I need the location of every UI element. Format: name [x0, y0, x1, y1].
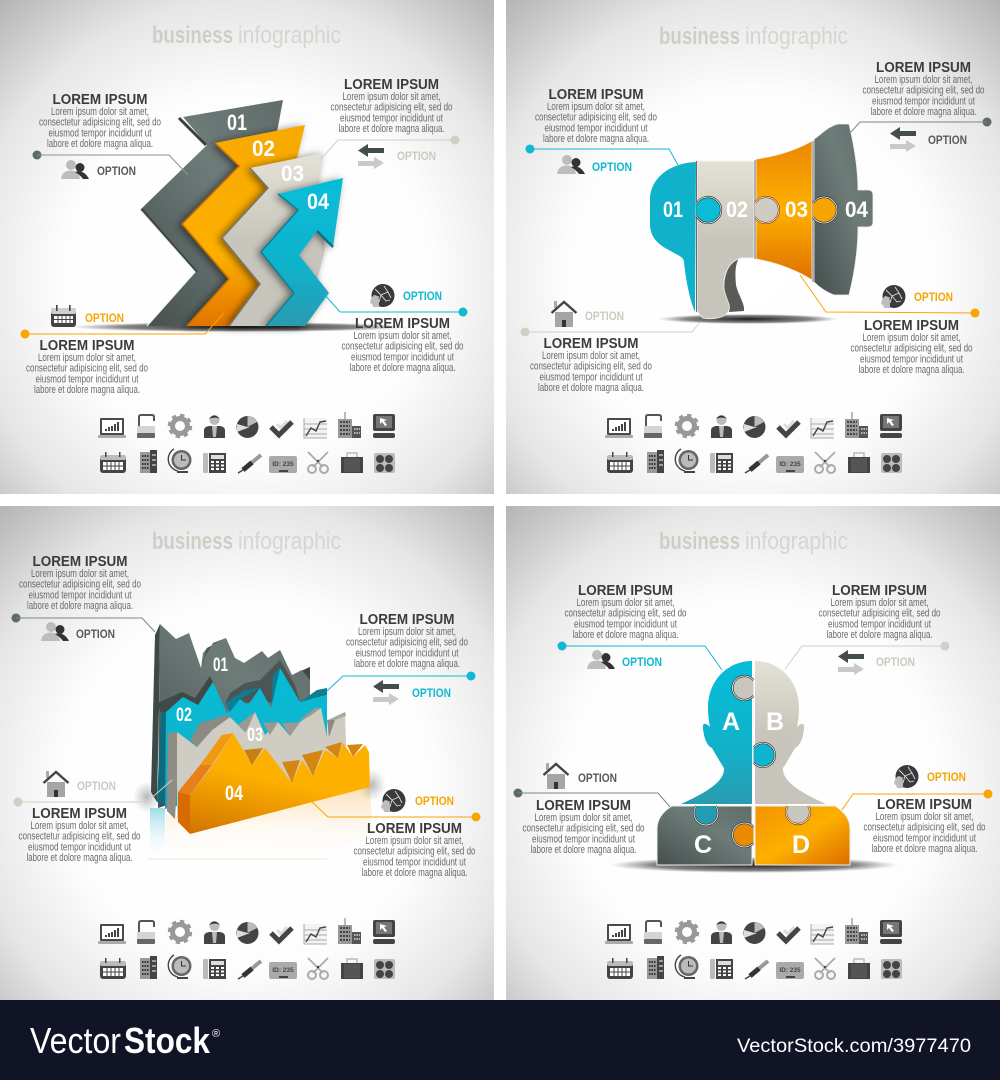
- piece 02 beige: [697, 161, 754, 319]
- text block: top left: consectetur adipisicing elit, sed do: [39, 117, 161, 129]
- letter labels: [694, 708, 810, 859]
- panel background: [506, 0, 1000, 494]
- icon strip: ID: 235: [272, 461, 294, 468]
- soft shadow left: [133, 781, 161, 813]
- text block: bottom left: labore et dolore magna aliqua.: [530, 844, 636, 856]
- number labels: 03: [785, 197, 808, 222]
- text block: top right: labore et dolore magna aliqua.: [338, 123, 444, 135]
- text block: bottom right: eiusmod tempor incididunt ut: [860, 353, 963, 365]
- text block: top left: Lorem ipsum dolor sit amet,: [51, 106, 149, 118]
- text block: top left: [564, 583, 686, 641]
- text block: bottom left: eiusmod tempor incididunt ut: [28, 841, 131, 853]
- title: infographic: [745, 528, 848, 555]
- icon strip: [98, 412, 395, 473]
- panel: megaphone: [506, 0, 1000, 494]
- connector: grey: [12, 614, 155, 632]
- ground shadow: [70, 322, 410, 332]
- text block: top left: Lorem ipsum dolor sit amet,: [576, 597, 674, 609]
- text block: top right: [818, 583, 940, 641]
- text block: bottom right: LOREM IPSUM: [864, 318, 959, 334]
- option label: OPTION: [622, 655, 662, 669]
- panel: 3D area chart: [0, 506, 494, 1000]
- number labels: 04: [307, 189, 330, 214]
- layer 04 orange: [178, 733, 370, 834]
- text block: bottom left: [26, 338, 148, 396]
- text block: bottom left: Lorem ipsum dolor sit amet,: [534, 812, 632, 824]
- option label: OPTION: [592, 160, 632, 174]
- icon: arrows: [838, 650, 864, 675]
- connector: beige: [14, 780, 172, 806]
- piece 01 blue: [650, 162, 696, 312]
- option label: OPTION: [85, 311, 124, 325]
- icon: people: [587, 650, 615, 669]
- handle shadow: [724, 258, 744, 312]
- connector: orange: [800, 275, 980, 318]
- text block: bottom right: LOREM IPSUM: [877, 797, 972, 813]
- icon: globe head: [894, 765, 918, 788]
- icon: people: [61, 160, 89, 179]
- text block: bottom left: [530, 336, 652, 394]
- text block: top right: LOREM IPSUM: [876, 60, 971, 76]
- text block: bottom left: LOREM IPSUM: [32, 806, 127, 822]
- text block: bottom left: consectetur adipisicing elit, sed do: [522, 823, 644, 835]
- logo: ®: [212, 1028, 220, 1040]
- text block: top right: eiusmod tempor incididunt ut: [356, 647, 458, 659]
- connector: blue: [325, 295, 468, 316]
- text block: top right: [330, 77, 452, 135]
- layer 01 grey: [151, 624, 310, 808]
- text block: top left: consectetur adipisicing elit, sed do: [564, 608, 686, 620]
- piece A blue: [681, 661, 752, 804]
- text block: top left: labore et dolore magna aliqua.: [572, 629, 678, 641]
- icon: arrows: [358, 144, 384, 169]
- puzzle knobs: [696, 197, 837, 223]
- title: [152, 528, 341, 555]
- number labels: [663, 197, 869, 222]
- text block: bottom right: labore et dolore magna aliqua.: [350, 362, 456, 374]
- text block: bottom left: Lorem ipsum dolor sit amet,: [542, 350, 640, 362]
- connector: orange: [20, 313, 224, 338]
- text block: bottom left: labore et dolore magna aliqua.: [34, 384, 140, 396]
- text block: top right: consectetur adipisicing elit, sed do: [330, 102, 452, 114]
- icon: globe head: [370, 284, 394, 307]
- number labels: 02: [252, 136, 275, 161]
- text block: bottom left: LOREM IPSUM: [544, 336, 638, 352]
- text block: top left: Lorem ipsum dolor sit amet,: [547, 101, 645, 113]
- piece D orange: [755, 806, 850, 865]
- icon: calendar: [51, 305, 76, 327]
- text block: top left: [39, 92, 161, 150]
- text block: top right: Lorem ipsum dolor sit amet,: [830, 597, 928, 609]
- option label: OPTION: [76, 627, 115, 641]
- text block: top left: labore et dolore magna aliqua.: [47, 138, 153, 150]
- text block: bottom right: LOREM IPSUM: [367, 821, 462, 837]
- option label: OPTION: [585, 309, 624, 323]
- icon: house: [44, 771, 68, 797]
- panel background: [0, 0, 494, 494]
- title: business: [152, 22, 233, 49]
- icon strip: ID: 235: [272, 967, 294, 974]
- text block: bottom left: LOREM IPSUM: [536, 798, 631, 814]
- icon strip: [605, 412, 902, 473]
- option label: OPTION: [578, 771, 617, 785]
- text block: bottom right: Lorem ipsum dolor sit amet,: [366, 835, 464, 847]
- text block: bottom left: consectetur adipisicing elit, sed do: [18, 831, 140, 843]
- text block: top left: eiusmod tempor incididunt ut: [544, 122, 648, 134]
- option label: OPTION: [415, 794, 454, 808]
- text block: bottom right: [354, 821, 476, 879]
- piece C grey: [657, 806, 752, 865]
- text block: top left: LOREM IPSUM: [32, 554, 128, 570]
- connector: beige: [320, 136, 460, 160]
- icon: house: [544, 763, 568, 789]
- number labels: 04: [225, 782, 243, 805]
- text block: bottom left: [18, 806, 140, 864]
- text block: bottom right: [850, 318, 972, 376]
- text block: top left: eiusmod tempor incididunt ut: [48, 127, 152, 139]
- text block: bottom right: consectetur adipisicing elit, sed do: [354, 846, 476, 858]
- chart: megaphone puzzle: [650, 124, 873, 319]
- title: infographic: [238, 528, 341, 555]
- letter labels: B: [766, 708, 784, 736]
- text block: top right: labore et dolore magna aliqua.: [826, 629, 932, 641]
- chart: layered 3D area chart: [151, 624, 370, 834]
- piece 04 grey: [814, 124, 873, 295]
- arrow 04 blue: [261, 178, 343, 326]
- text block: top left: [19, 554, 141, 612]
- option label: OPTION: [876, 655, 915, 669]
- title: business: [152, 528, 233, 555]
- text block: bottom left: labore et dolore magna aliqua.: [26, 852, 132, 864]
- text block: top right: [862, 60, 984, 118]
- option label: OPTION: [927, 770, 966, 784]
- letter labels: A: [722, 708, 740, 736]
- text block: top right: Lorem ipsum dolor sit amet,: [342, 91, 440, 103]
- connector: grey: [32, 150, 188, 175]
- logo: Vector: [30, 1020, 121, 1061]
- number labels: 01: [213, 655, 228, 676]
- logo: Stock: [124, 1020, 211, 1061]
- text block: top right: LOREM IPSUM: [832, 583, 927, 599]
- connector: beige: [785, 642, 950, 669]
- icon: people: [41, 622, 69, 641]
- text block: top right: consectetur adipisicing elit, sed do: [346, 637, 468, 649]
- text block: top right: eiusmod tempor incididunt ut: [828, 618, 931, 630]
- logo: [30, 1020, 220, 1061]
- floor reflections: [148, 785, 372, 860]
- text block: top right: LOREM IPSUM: [344, 77, 439, 93]
- option label: OPTION: [397, 149, 436, 163]
- text block: bottom right: eiusmod tempor incididunt ut: [363, 856, 466, 868]
- number labels: 02: [176, 705, 192, 726]
- number labels: 01: [663, 197, 683, 222]
- number labels: 04: [845, 197, 869, 222]
- connector: grey: [851, 118, 992, 132]
- text block: top left: [535, 87, 657, 145]
- connector: orange: [842, 790, 992, 810]
- text block: bottom left: consectetur adipisicing elit, sed do: [26, 363, 148, 375]
- text block: top left: labore et dolore magna aliqua.: [543, 133, 649, 145]
- title: infographic: [238, 22, 341, 49]
- text block: bottom right: eiusmod tempor incididunt ut: [351, 351, 454, 363]
- panel background: [506, 506, 1000, 1000]
- icon: globe head: [381, 789, 406, 812]
- arrow 02 orange: [182, 125, 305, 326]
- layer 03 beige: [167, 708, 346, 819]
- puzzle seams: [696, 141, 813, 312]
- arrow 01 grey: [140, 100, 283, 326]
- layer 02 blue: [157, 668, 327, 809]
- icon strip: [98, 918, 395, 979]
- icon: arrows: [890, 127, 916, 152]
- chart: head puzzle: [657, 661, 850, 865]
- text block: top left: eiusmod tempor incididunt ut: [28, 589, 132, 601]
- text block: top left: eiusmod tempor incididunt ut: [574, 618, 677, 630]
- option label: OPTION: [403, 289, 442, 303]
- letter labels: D: [792, 831, 810, 859]
- ground shadow: [658, 314, 838, 324]
- piece B beige: [755, 661, 826, 804]
- text block: top right: LOREM IPSUM: [360, 612, 454, 628]
- connector: beige: [520, 322, 700, 336]
- text block: bottom right: LOREM IPSUM: [355, 316, 450, 332]
- option label: OPTION: [77, 779, 116, 793]
- text block: top left: LOREM IPSUM: [52, 92, 148, 108]
- text block: top left: LOREM IPSUM: [578, 583, 673, 599]
- text block: bottom left: consectetur adipisicing elit, sed do: [530, 361, 652, 373]
- text block: top right: labore et dolore magna aliqua.: [354, 658, 460, 670]
- icon: arrows: [373, 680, 399, 705]
- icon strip: ID: 235: [779, 461, 801, 468]
- number labels: [176, 655, 263, 805]
- number labels: [227, 110, 330, 214]
- number labels: 03: [247, 725, 263, 746]
- text block: top right: [346, 612, 468, 670]
- icon: globe head: [881, 285, 906, 308]
- soft shadow right: [358, 769, 386, 801]
- text block: bottom right: Lorem ipsum dolor sit amet,: [354, 330, 452, 342]
- title: [659, 23, 848, 50]
- connector: blue: [526, 144, 678, 165]
- title: [659, 528, 848, 555]
- text block: top right: Lorem ipsum dolor sit amet,: [358, 626, 456, 638]
- title: [152, 22, 341, 49]
- text block: top right: consectetur adipisicing elit, sed do: [818, 608, 940, 620]
- text block: top left: Lorem ipsum dolor sit amet,: [31, 568, 129, 580]
- ground shadow: [610, 857, 898, 873]
- icon: house: [552, 301, 576, 327]
- text block: bottom right: consectetur adipisicing elit, sed do: [342, 341, 464, 353]
- text block: top left: consectetur adipisicing elit, sed do: [19, 579, 141, 591]
- text block: bottom right: [342, 316, 464, 374]
- arrow 03 beige: [222, 153, 325, 326]
- text block: bottom left: [522, 798, 644, 856]
- title: business: [659, 23, 740, 50]
- icon: people: [557, 155, 585, 174]
- text block: bottom left: Lorem ipsum dolor sit amet,: [30, 820, 128, 832]
- image id: VectorStock.com/3977470: [737, 1036, 971, 1057]
- footer band: [0, 1000, 1000, 1080]
- puzzle knobs: [694, 676, 810, 847]
- connector: blue: [326, 672, 476, 692]
- text block: top right: eiusmod tempor incididunt ut: [340, 112, 443, 124]
- text block: bottom left: labore et dolore magna aliqua.: [538, 382, 644, 394]
- text block: top left: consectetur adipisicing elit, sed do: [535, 112, 657, 124]
- icon strip: ID: 235: [779, 967, 801, 974]
- letter labels: C: [694, 831, 712, 859]
- text block: bottom left: eiusmod tempor incididunt ut: [540, 371, 642, 383]
- text block: bottom right: Lorem ipsum dolor sit amet,: [862, 332, 960, 344]
- panel: head puzzle: [506, 506, 1000, 1000]
- title: business: [659, 528, 740, 555]
- number labels: 03: [281, 161, 304, 186]
- number labels: 01: [227, 110, 247, 135]
- connector: blue: [558, 642, 722, 670]
- option label: OPTION: [914, 290, 953, 304]
- option label: OPTION: [412, 686, 451, 700]
- option label: OPTION: [928, 133, 967, 147]
- title: infographic: [745, 23, 848, 50]
- text block: top left: labore et dolore magna aliqua.: [27, 600, 133, 612]
- number labels: 02: [726, 197, 748, 222]
- text block: bottom left: eiusmod tempor incididunt ut: [36, 373, 138, 385]
- connector: orange: [310, 800, 480, 822]
- icon strip: [605, 918, 902, 979]
- text block: bottom left: Lorem ipsum dolor sit amet,: [38, 352, 136, 364]
- panel background: [0, 506, 494, 1000]
- text block: bottom right: [864, 797, 986, 855]
- chart: four zigzag arrows: [140, 100, 343, 326]
- option label: OPTION: [97, 164, 136, 178]
- text block: bottom left: eiusmod tempor incididunt ut: [532, 833, 635, 845]
- piece 03 orange: [756, 141, 812, 280]
- text block: bottom left: LOREM IPSUM: [40, 338, 134, 354]
- connector: grey: [514, 788, 670, 807]
- text block: top left: LOREM IPSUM: [548, 87, 644, 103]
- panel: zigzag arrows: [0, 0, 494, 494]
- text block: bottom right: labore et dolore magna aliqua.: [362, 867, 468, 879]
